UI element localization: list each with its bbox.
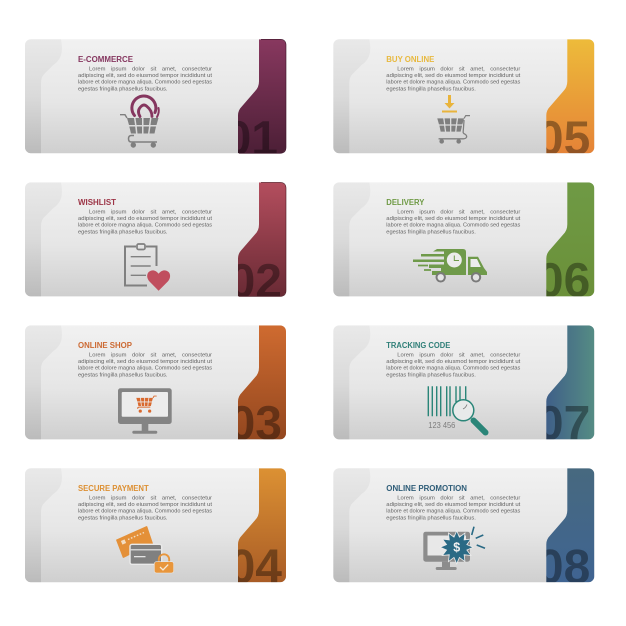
icon: delivery truck (413, 249, 487, 281)
left fold strip (333, 39, 370, 153)
heading: E-COMMERCE (78, 54, 133, 64)
heading: ONLINE PROMOTION (386, 483, 467, 493)
number 05: 05 (537, 112, 590, 165)
body text: adipiscing elit, sed do eiusmod tempor incididunt ut (386, 216, 521, 222)
body text: Lorem ipsum dolor sit amet, consectetur (89, 66, 212, 72)
number 06: 06 (537, 254, 590, 307)
body text: labore et dolore magna aliqua. Commodo sed egestas (386, 509, 520, 515)
body text: egestas fringilla phasellus faucibus. (78, 515, 168, 521)
body text: Lorem ipsum dolor sit amet, consectetur (89, 209, 212, 215)
body text: adipiscing elit, sed do eiusmod tempor incididunt ut (78, 359, 212, 365)
body text: Lorem ipsum dolor sit amet, consectetur (397, 209, 520, 215)
number 07: 07 (537, 397, 590, 450)
coloured tab (546, 325, 594, 439)
body text: Lorem ipsum dolor sit amet, consectetur (397, 495, 520, 501)
card 06: delivery (333, 182, 594, 307)
coloured tab (238, 468, 286, 582)
heading: DELIVERY (386, 197, 424, 207)
card background (333, 325, 594, 439)
body text: egestas fringilla phasellus faucibus. (386, 372, 476, 378)
icon: monitor with dollar burst (423, 527, 485, 570)
body text: adipiscing elit, sed do eiusmod tempor incididunt ut (78, 216, 212, 222)
card 08: online promotion (333, 468, 594, 594)
body text (386, 66, 521, 92)
body text (78, 66, 212, 92)
body text: adipiscing elit, sed do eiusmod tempor incididunt ut (78, 73, 212, 79)
body text (78, 209, 212, 235)
card background (333, 182, 594, 296)
number 08: 08 (537, 541, 590, 594)
icon: arrow into cart (437, 95, 470, 144)
body text: egestas fringilla phasellus faucibus. (386, 515, 476, 521)
tab edge (239, 182, 286, 296)
heading: TRACKING CODE (386, 340, 450, 350)
left fold strip (25, 468, 62, 582)
body text: labore et dolore magna aliqua. Commodo sed egestas (386, 80, 520, 86)
coloured tab (238, 182, 286, 296)
heading: ONLINE SHOP (78, 340, 132, 350)
body text: adipiscing elit, sed do eiusmod tempor incididunt ut (386, 359, 521, 365)
icon: monitor with cart (118, 388, 172, 434)
card 02: wishlist (25, 182, 286, 308)
coloured tab (546, 182, 594, 296)
card 01: e-commerce (25, 39, 286, 165)
icon: shopping cart with at sign (120, 96, 159, 148)
card background (333, 468, 594, 582)
body text (78, 495, 212, 521)
card 07: tracking code (333, 325, 594, 450)
icon: monitor with dollar burst: $ (453, 541, 460, 555)
card 03: online shop (25, 325, 286, 450)
body text: labore et dolore magna aliqua. Commodo sed egestas (78, 80, 212, 86)
card background (25, 182, 286, 296)
coloured tab (238, 39, 286, 153)
body text: Lorem ipsum dolor sit amet, consectetur (397, 66, 520, 72)
left fold strip (333, 182, 370, 296)
number 02: 02 (229, 255, 282, 308)
body text: Lorem ipsum dolor sit amet, consectetur (89, 352, 212, 358)
body text: egestas fringilla phasellus faucibus. (386, 229, 476, 235)
body text: Lorem ipsum dolor sit amet, consectetur (397, 352, 520, 358)
body text: egestas fringilla phasellus faucibus. (78, 372, 168, 378)
body text: egestas fringilla phasellus faucibus. (386, 86, 476, 92)
coloured tab (546, 468, 594, 582)
icon: barcode with magnifier: 123 456 (428, 421, 456, 430)
body text: labore et dolore magna aliqua. Commodo sed egestas (78, 223, 212, 229)
left fold strip (25, 325, 62, 439)
card background (25, 468, 286, 582)
heading: SECURE PAYMENT (78, 483, 149, 493)
body text (386, 209, 521, 235)
left fold strip (25, 182, 62, 296)
body text (386, 352, 521, 378)
card background (25, 39, 286, 153)
body text: labore et dolore magna aliqua. Commodo sed egestas (386, 223, 520, 229)
number 03: 03 (229, 397, 282, 450)
card background (333, 39, 594, 153)
body text: Lorem ipsum dolor sit amet, consectetur (89, 495, 212, 501)
number 01: 01 (225, 112, 278, 165)
coloured tab (546, 39, 594, 153)
body text: adipiscing elit, sed do eiusmod tempor incididunt ut (78, 502, 212, 508)
body text: adipiscing elit, sed do eiusmod tempor incididunt ut (386, 502, 521, 508)
body text: egestas fringilla phasellus faucibus. (78, 229, 168, 235)
card 04: secure payment (25, 468, 286, 594)
icon: clipboard with heart (125, 244, 170, 291)
icon: credit cards with padlock (117, 527, 174, 573)
body text (386, 495, 521, 521)
body text: labore et dolore magna aliqua. Commodo sed egestas (78, 366, 212, 372)
heading: BUY ONLINE (386, 54, 434, 64)
heading: WISHLIST (78, 197, 117, 207)
icon: barcode with magnifier (428, 386, 486, 432)
body text: adipiscing elit, sed do eiusmod tempor incididunt ut (386, 73, 521, 79)
card 05: buy online (333, 39, 594, 165)
left fold strip (25, 39, 62, 153)
coloured tab (238, 325, 286, 439)
card background (25, 325, 286, 439)
body text (78, 352, 212, 378)
left fold strip (333, 468, 370, 582)
number 04: 04 (229, 541, 282, 594)
body text: egestas fringilla phasellus faucibus. (78, 86, 168, 92)
body text: labore et dolore magna aliqua. Commodo sed egestas (386, 366, 520, 372)
left fold strip (333, 325, 370, 439)
tab edge (239, 39, 286, 153)
body text: labore et dolore magna aliqua. Commodo sed egestas (78, 509, 212, 515)
